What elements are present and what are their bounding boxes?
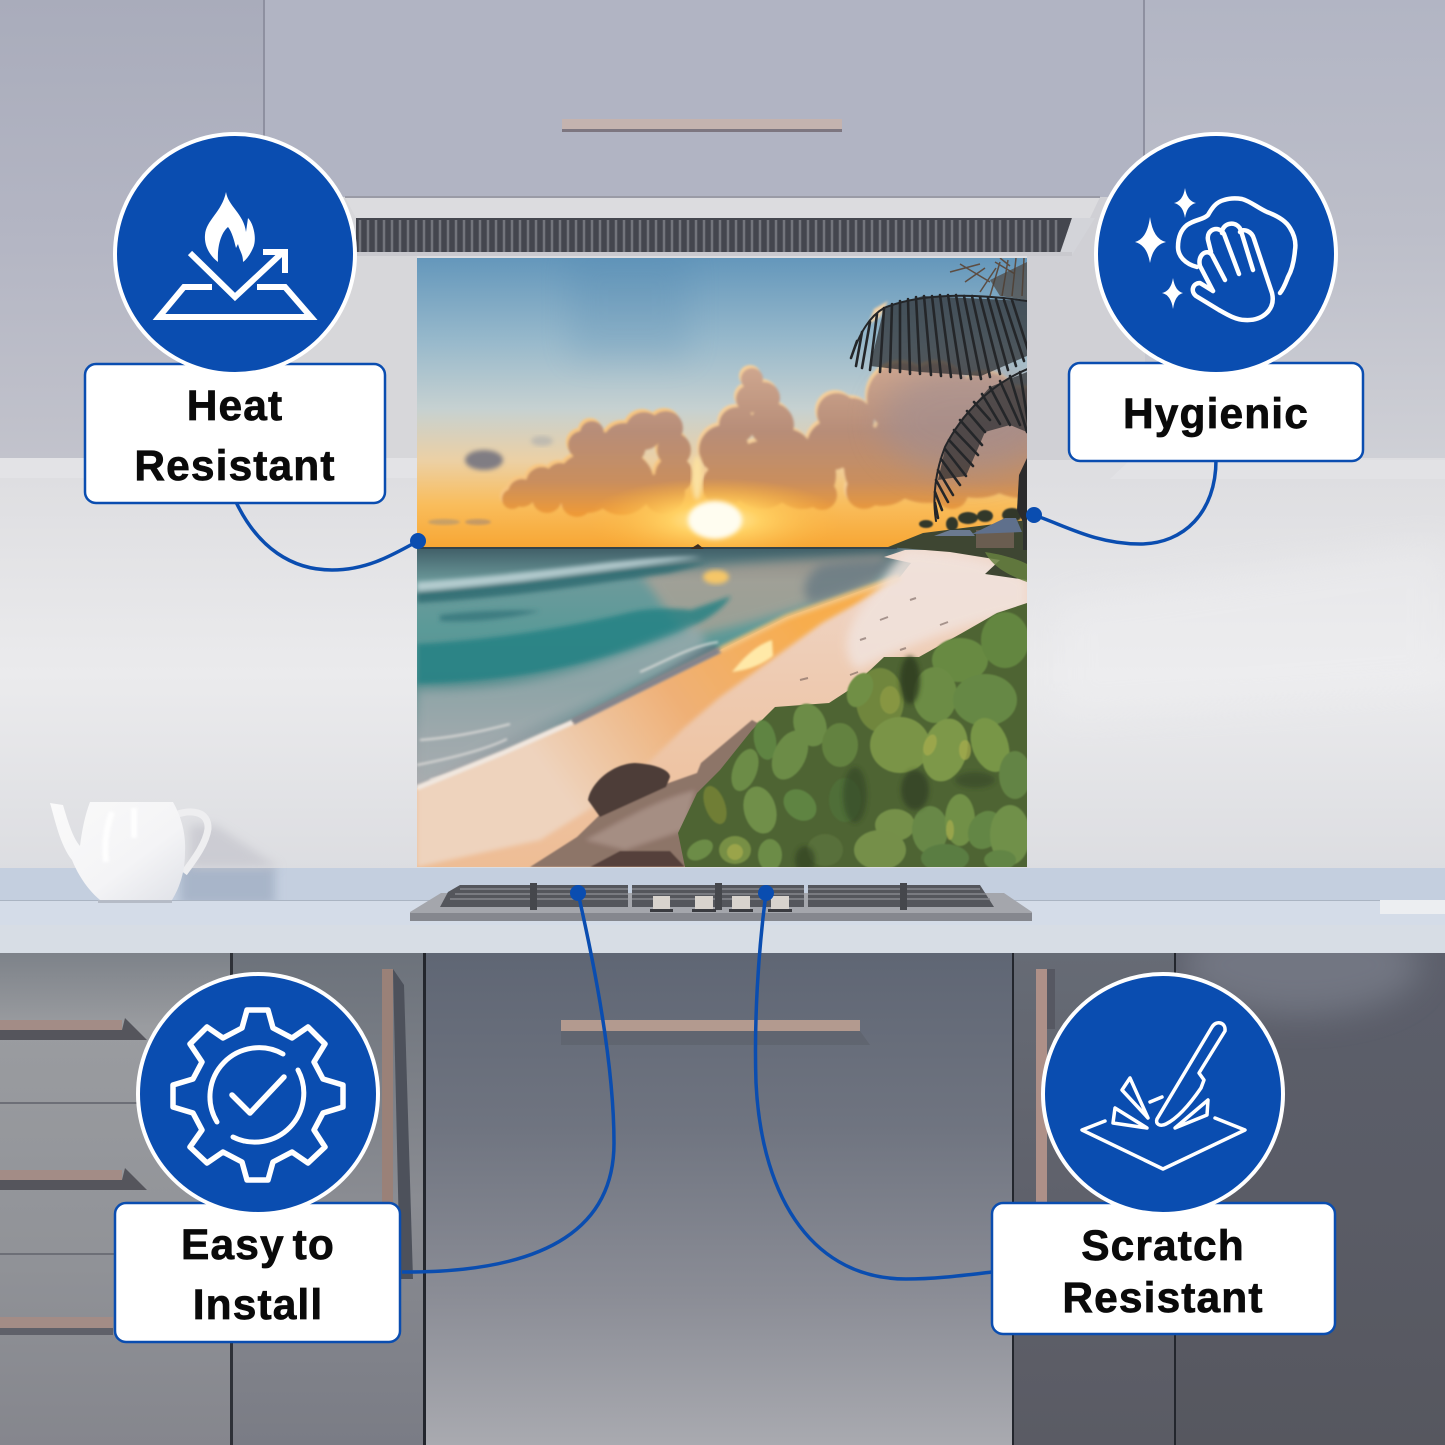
sea (417, 544, 924, 788)
base cabinets (0, 915, 1445, 1445)
upper cabinet handle (562, 119, 842, 132)
label box: easy to install: Install (193, 1282, 323, 1329)
label box: heat resistant: Heat (187, 383, 283, 430)
clouds (428, 301, 1077, 525)
label box: easy to install: Easy to (181, 1222, 335, 1269)
palm tree (851, 258, 1030, 550)
label box: heat resistant: Resistant (134, 443, 336, 490)
badge: scratch resistant icon (1043, 974, 1283, 1214)
icon: hand wiping with sparkles (1135, 188, 1295, 320)
label box: scratch resistant: Scratch (1081, 1223, 1245, 1270)
icon: flame over surface with arrow (159, 192, 311, 317)
sun (610, 456, 814, 547)
sunset beach splashback panel (417, 250, 1077, 874)
rocks (530, 720, 770, 867)
wall light (1060, 540, 1445, 720)
label box: heat resistant (85, 364, 385, 503)
label box: scratch resistant: Resistant (1062, 1275, 1264, 1322)
sky (417, 250, 1027, 548)
cabinet handles (0, 969, 1055, 1335)
bushes (678, 603, 1031, 874)
teapot (50, 802, 280, 903)
icon: gear with check (173, 1010, 343, 1180)
connector: hygienic (1026, 460, 1216, 544)
label box: easy to install (115, 1203, 400, 1342)
label box: hygienic (1069, 363, 1363, 461)
connector: heat resistant (236, 502, 426, 570)
connector: easy to install (402, 885, 614, 1272)
badge: easy to install icon (138, 974, 378, 1214)
badge: hygienic icon (1096, 134, 1336, 374)
badge: heat resistant icon (115, 134, 355, 374)
icon: knife scratching a surface (1082, 1023, 1245, 1169)
upper cabinets (0, 0, 1445, 479)
extractor hood (345, 196, 1100, 256)
beach sand (417, 550, 1027, 867)
gas hob (410, 883, 1032, 921)
connector: scratch resistant (755, 885, 992, 1279)
far shore and huts (888, 508, 1027, 582)
worktop (0, 868, 1445, 925)
label box: scratch resistant (992, 1203, 1335, 1334)
label box: hygienic: Hygienic (1123, 391, 1309, 438)
